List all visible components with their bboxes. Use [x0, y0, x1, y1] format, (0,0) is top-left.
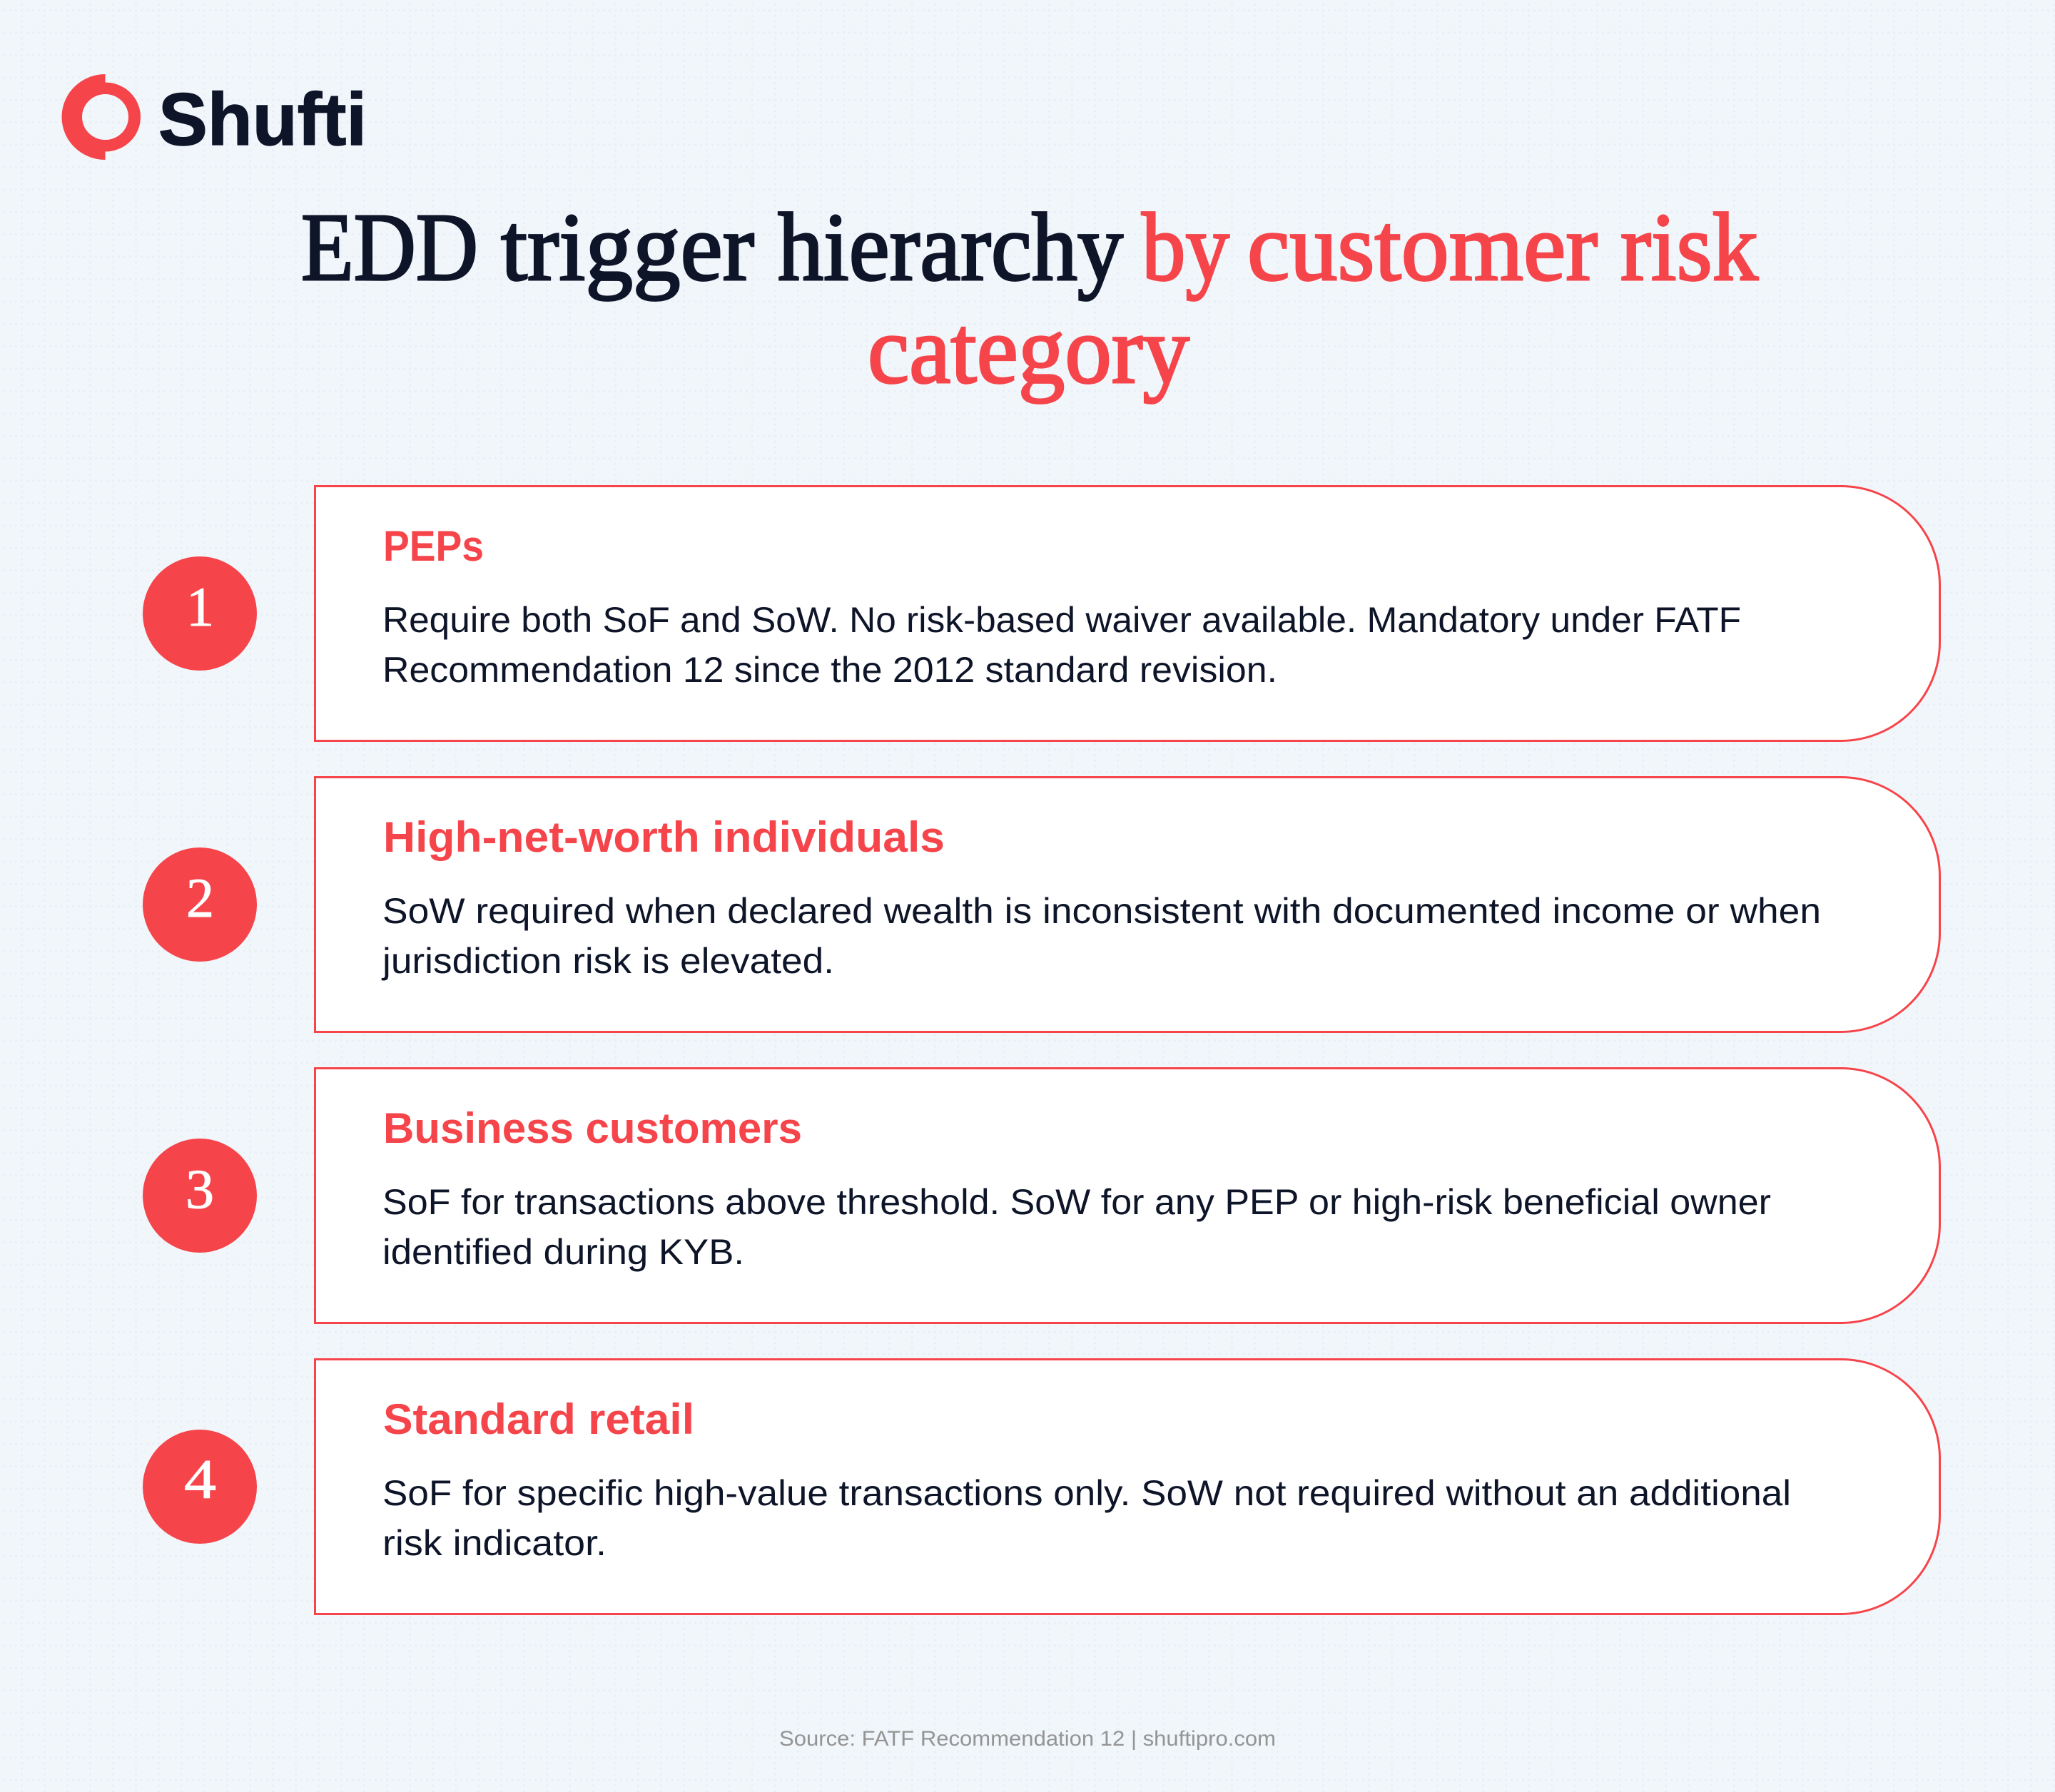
- title: customer: [1247, 194, 1598, 301]
- panel: Business customers: SoF for transactions above threshold. SoW for any PEP or high-risk beneficial owner: [382, 1182, 1771, 1222]
- number badge 2: [143, 847, 257, 962]
- number badge 3: [143, 1139, 257, 1253]
- title: by: [1142, 194, 1229, 301]
- panel: PEPs: Recommendation 12 since the 2012 standard revision.: [382, 650, 1277, 690]
- panel: Business customers: [315, 1069, 1939, 1323]
- title: trigger: [501, 194, 754, 301]
- title: [301, 194, 1758, 404]
- step 1: PEPs: [143, 487, 1939, 740]
- title: EDD: [301, 194, 478, 301]
- panel: Standard retail: SoF for specific high-value transactions only. SoW not required without an additional: [382, 1473, 1791, 1513]
- title: category: [868, 297, 1189, 404]
- panel: PEPs: Require both SoF and SoW. No risk-based waiver available. Mandatory under FATF: [382, 600, 1741, 640]
- title: risk: [1620, 194, 1758, 301]
- source footnote: Source: FATF Recommendation 12 | shuftipro.com: [779, 1727, 1276, 1751]
- number badge 1: [143, 556, 257, 671]
- panel: High-net-worth individuals: High-net-worth individuals: [383, 813, 945, 861]
- title: hierarchy: [778, 194, 1123, 301]
- panel: Standard retail: Standard retail: [383, 1395, 694, 1443]
- panel: High-net-worth individuals: SoW required when declared wealth is inconsistent with documented income or when: [382, 891, 1821, 931]
- step 2: High-net-worth individuals: [143, 778, 1939, 1032]
- panel: PEPs: PEPs: [383, 522, 484, 570]
- step 4: Standard retail: [143, 1360, 1939, 1614]
- panel: Standard retail: [315, 1360, 1939, 1614]
- logo: Shufti: [61, 74, 367, 161]
- number badge 1: 1: [186, 576, 214, 638]
- panel: High-net-worth individuals: jurisdiction risk is elevated.: [381, 941, 834, 981]
- panel: Business customers: identified during KYB.: [382, 1232, 744, 1272]
- number badge 3: 3: [186, 1158, 214, 1220]
- panel: High-net-worth individuals: [315, 778, 1939, 1032]
- logo wordmark: Shufti: [158, 78, 367, 161]
- step 3: Business customers: [143, 1069, 1939, 1323]
- number badge 4: 4: [184, 1448, 216, 1510]
- panel: Standard retail: risk indicator.: [382, 1523, 607, 1563]
- number badge 4: [143, 1430, 257, 1544]
- icon: logo ring: [61, 74, 141, 160]
- panel: PEPs: [315, 487, 1939, 740]
- panel: Business customers: Business customers: [383, 1104, 802, 1152]
- number badge 2: 2: [186, 867, 214, 929]
